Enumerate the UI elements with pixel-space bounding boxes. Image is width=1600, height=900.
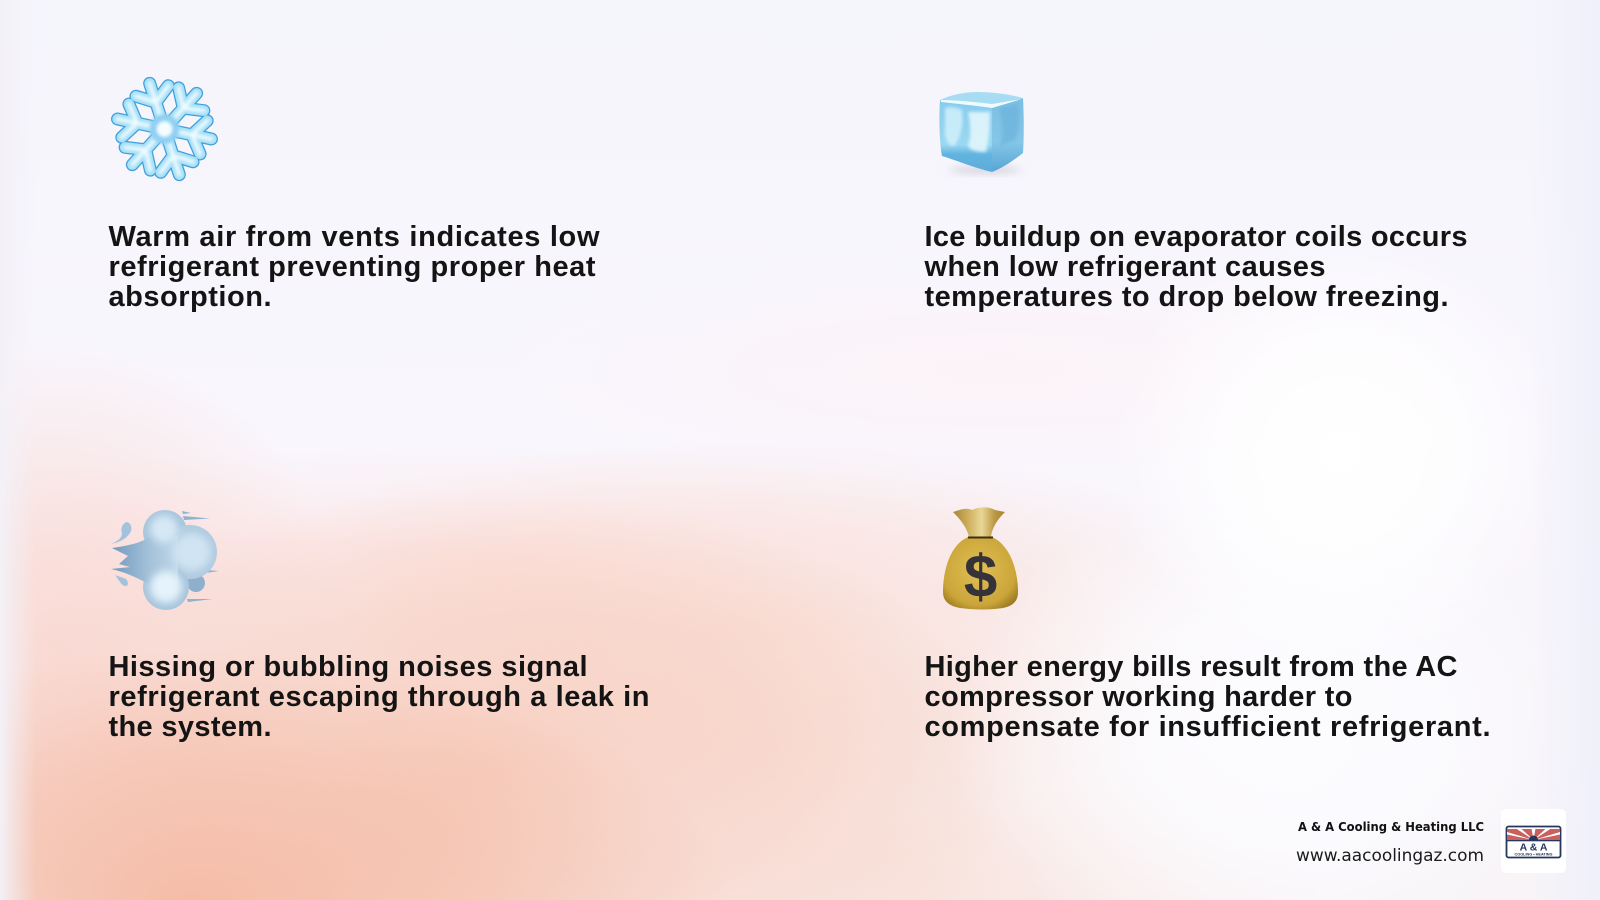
text: hissing: Hissing or bubbling noises signal [108,651,588,683]
text: ice buildup: Ice buildup on evaporator coils occurs [924,221,1468,253]
logo badge [1501,809,1566,873]
text: ice buildup: when low refrigerant causes [924,251,1326,283]
text: warm air: absorption. [108,281,272,313]
text: ice buildup [924,221,1468,313]
icon: wind cloud [111,510,219,610]
dollar sign: $ [964,543,997,610]
text: warm air [108,221,600,313]
icon: ice cube [939,92,1024,174]
text: hissing: refrigerant escaping through a leak in [108,681,650,713]
text: energy bills: compensate for insufficient refrigerant. [924,711,1490,743]
footer: website: www.aacoolingaz.com [1296,846,1484,866]
icon: snowflake [102,68,227,190]
text: energy bills: compressor working harder to [924,681,1352,713]
footer: company name: A & A Cooling & Heating LLC [1298,819,1484,834]
text: ice buildup: temperatures to drop below freezing. [924,281,1448,313]
text: energy bills: Higher energy bills result from the AC [924,651,1458,683]
logo tagline: COOLING • HEATING [1515,853,1553,857]
text: hissing: the system. [108,711,272,743]
icon: money bag [943,507,1018,610]
text: hissing [108,651,650,743]
text: energy bills [924,651,1490,743]
text: warm air: Warm air from vents indicates low [108,221,600,253]
logo wordmark: A & A [1520,842,1548,854]
text: warm air: refrigerant preventing proper heat [108,251,596,283]
